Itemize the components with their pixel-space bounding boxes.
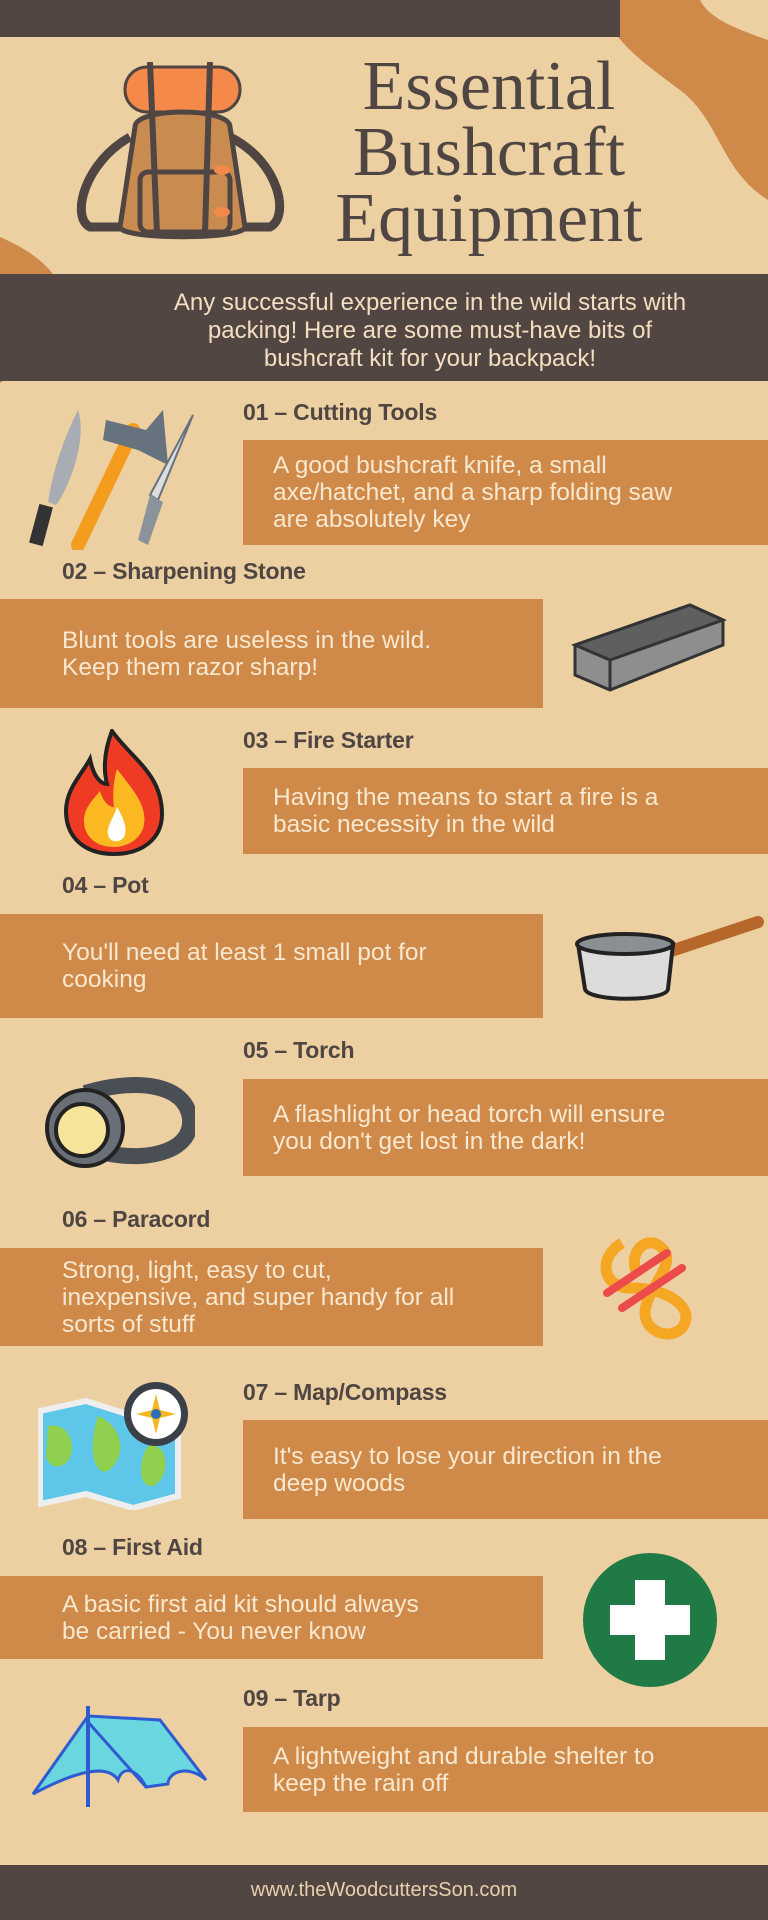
intro text: packing! Here are some must-have bits of	[208, 317, 652, 344]
box 03	[243, 768, 768, 854]
title	[335, 48, 643, 257]
box 07	[243, 1420, 768, 1519]
item 08: 08 – First Aid	[62, 1534, 203, 1560]
item 09: 09 – Tarp	[243, 1685, 340, 1711]
intro text	[174, 289, 686, 372]
box 05: you don't get lost in the dark!	[273, 1128, 585, 1154]
title: Equipment	[335, 180, 643, 257]
box 02	[0, 599, 543, 708]
box 04	[0, 914, 543, 1018]
intro text: bushcraft kit for your backpack!	[264, 345, 596, 372]
box 03: basic necessity in the wild	[273, 811, 555, 838]
title: Bushcraft	[353, 114, 625, 191]
box 06: sorts of stuff	[62, 1310, 195, 1338]
icon: backpack	[76, 62, 284, 240]
footer	[0, 1865, 768, 1920]
icon: sharpening stone	[571, 603, 727, 692]
item 04: 04 – Pot	[62, 872, 149, 898]
box 05	[243, 1079, 768, 1176]
top dark bar	[0, 0, 620, 37]
box 04: You'll need at least 1 small pot for	[62, 939, 427, 966]
box 07: deep woods	[273, 1470, 405, 1496]
intro band	[0, 274, 768, 381]
box 06: Strong, light, easy to cut,	[62, 1256, 332, 1284]
box 01	[243, 440, 768, 545]
title: Essential	[363, 48, 615, 125]
icon: fire	[64, 729, 164, 856]
box 08	[0, 1576, 543, 1659]
icon: tarp	[32, 1706, 208, 1807]
item 02: 02 – Sharpening Stone	[62, 558, 306, 584]
box 09	[243, 1727, 768, 1812]
box 06: inexpensive, and super handy for all	[62, 1284, 454, 1310]
box 09: A lightweight and durable shelter to	[273, 1742, 654, 1770]
box 04: cooking	[62, 966, 146, 993]
box 05: A flashlight or head torch will ensure	[273, 1100, 665, 1128]
icon: map and compass	[38, 1382, 188, 1510]
icon: torch	[45, 1077, 195, 1168]
icon: first aid	[583, 1553, 717, 1687]
box 06	[0, 1248, 543, 1346]
icon: pot	[575, 916, 764, 1001]
decorative background blobs	[0, 0, 768, 383]
item 05: 05 – Torch	[243, 1037, 354, 1063]
item 01: 01 – Cutting Tools	[243, 399, 437, 425]
box 09: keep the rain off	[273, 1770, 448, 1796]
footer url: www.theWoodcuttersSon.com	[251, 1879, 517, 1901]
box 08: A basic first aid kit should always	[62, 1590, 419, 1618]
item 06: 06 – Paracord	[62, 1206, 210, 1232]
box 08: be carried - You never know	[62, 1618, 366, 1644]
box 01: A good bushcraft knife, a small	[273, 452, 607, 479]
item 07: 07 – Map/Compass	[243, 1379, 447, 1405]
box 01: are absolutely key	[273, 506, 470, 533]
icon: cutting tools	[29, 410, 194, 550]
intro text: Any successful experience in the wild starts with	[174, 289, 686, 316]
item 03: 03 – Fire Starter	[243, 727, 413, 753]
box 02: Blunt tools are useless in the wild.	[62, 626, 431, 654]
box 02: Keep them razor sharp!	[62, 654, 318, 680]
icon: paracord	[600, 1237, 692, 1340]
box 07: It's easy to lose your direction in the	[273, 1442, 662, 1470]
box 03: Having the means to start a fire is a	[273, 784, 658, 811]
box 01: axe/hatchet, and a sharp folding saw	[273, 479, 672, 506]
